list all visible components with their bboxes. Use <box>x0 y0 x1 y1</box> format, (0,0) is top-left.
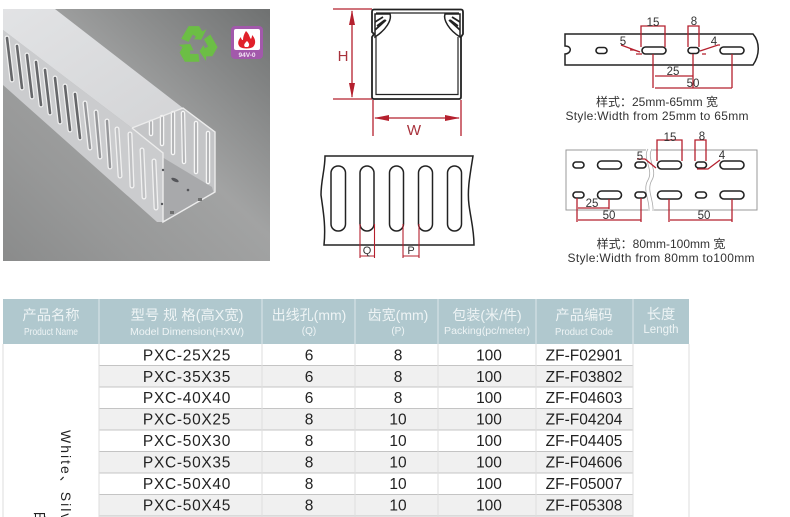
row PXC-50X35: 10 <box>389 454 407 472</box>
diagram: slotted side view with Q and P dimensions: Q <box>363 245 372 257</box>
H dimension <box>333 9 372 99</box>
caption: 80mm-100mm style <box>568 236 754 265</box>
table header: 型号 规 格(高X宽) <box>131 307 243 324</box>
row PXC-50X35: 8 <box>305 454 313 472</box>
table header: 齿宽(mm) <box>368 307 428 323</box>
diagram: duct cross-section with H and W dimensions: W <box>407 122 422 139</box>
row PXC-50X25 <box>143 412 623 428</box>
diagram: slotted side view with Q and P dimensions <box>321 156 474 258</box>
row PXC-40X40 <box>143 390 622 407</box>
row PXC-50X30: 10 <box>389 433 407 450</box>
row PXC-50X25: ZF-F04204 <box>546 412 623 428</box>
duct interior wall <box>132 108 215 222</box>
row PXC-50X30: 8 <box>305 433 313 450</box>
diagram: hole pattern for 80mm-100mm widths: 4 <box>719 150 726 162</box>
diagram: hole pattern for 25mm-65mm widths: 4 <box>711 36 718 48</box>
lip edge highlights <box>132 108 215 222</box>
diagram: hole pattern for 80mm-100mm widths: 50 <box>603 210 615 222</box>
left wall slots <box>7 38 208 208</box>
table header: (P) <box>391 326 405 337</box>
diagram: hole pattern for 80mm-100mm widths: 15 <box>664 132 676 144</box>
row PXC-50X25: 8 <box>305 412 313 428</box>
row PXC-35X35: 6 <box>305 369 313 386</box>
diagram: hole pattern for 80mm-100mm widths: 8 <box>699 131 705 143</box>
diagram: hole pattern for 25mm-65mm widths: 15 <box>647 17 659 29</box>
row PXC-50X45: 10 <box>389 498 407 514</box>
row PXC-50X30: PXC-50X30 <box>143 433 231 450</box>
row PXC-40X40: 8 <box>394 390 402 407</box>
diagram: hole pattern for 25mm-65mm widths <box>565 16 758 90</box>
diagram: duct cross-section with H and W dimensions <box>333 9 463 139</box>
row PXC-40X40: ZF-F04603 <box>546 390 622 407</box>
floor holes <box>161 169 189 205</box>
row PXC-50X25: PXC-50X25 <box>143 412 231 428</box>
duct top face <box>3 9 183 128</box>
row PXC-50X25: 100 <box>476 412 502 428</box>
table header: 长度 <box>647 306 675 323</box>
row PXC-50X40 <box>143 476 622 493</box>
row PXC-50X40: ZF-F05007 <box>546 476 622 493</box>
row PXC-25X25: 100 <box>476 348 502 364</box>
break line <box>648 148 652 212</box>
diagram: slotted side view with Q and P dimensions: P <box>407 245 415 257</box>
diagram: hole pattern for 25mm-65mm widths: 5 <box>620 36 626 48</box>
caption: 25mm-65mm style: 样式：25mm-65mm 宽 <box>596 94 718 109</box>
right wall slots <box>151 113 208 182</box>
row PXC-40X40: PXC-40X40 <box>143 390 231 407</box>
caption: 80mm-100mm style: 样式：80mm-100mm 宽 <box>597 236 725 251</box>
row PXC-35X35: PXC-35X35 <box>143 369 231 386</box>
row PXC-50X35: PXC-50X35 <box>143 454 231 472</box>
table header <box>3 299 689 344</box>
diagram: hole pattern for 25mm-65mm widths: 50 <box>687 78 699 90</box>
caption: 25mm-65mm style: Style:Width from 25mm to 65mm <box>566 109 748 123</box>
row PXC-35X35: 100 <box>476 369 502 386</box>
row PXC-35X35 <box>143 369 622 386</box>
table header: 包装(米/件) <box>452 307 522 323</box>
row PXC-50X30: ZF-F04405 <box>546 433 622 450</box>
diagram: hole pattern for 80mm-100mm widths: 25 <box>586 198 598 210</box>
table header: Product Name <box>24 327 78 338</box>
row PXC-25X25: ZF-F02901 <box>546 348 622 364</box>
row PXC-50X40: 10 <box>389 476 407 493</box>
row PXC-50X30: 100 <box>476 433 502 450</box>
row PXC-50X35: ZF-F04606 <box>546 454 622 472</box>
table header: 产品编码 <box>555 307 613 324</box>
icon: flame rating badge 94V-0: 94V-0 <box>238 52 256 59</box>
caption: 80mm-100mm style: Style:Width from 80mm to100mm <box>568 251 754 265</box>
W dimension <box>373 100 461 136</box>
icon: flame rating badge 94V-0 <box>231 26 263 59</box>
row stripes <box>99 366 633 516</box>
caption: 25mm-65mm style <box>566 94 748 123</box>
row PXC-50X30 <box>143 433 622 450</box>
row PXC-50X45: 100 <box>476 498 502 514</box>
row PXC-40X40: 100 <box>476 390 502 407</box>
row PXC-50X45: 8 <box>305 498 313 514</box>
table header: Model Dimension(HXW) <box>130 327 244 338</box>
diagram: hole pattern for 25mm-65mm widths: 8 <box>691 16 697 28</box>
table header: Length <box>643 324 679 336</box>
row PXC-35X35: ZF-F03802 <box>546 369 622 386</box>
table header: 出线孔(mm) <box>272 307 346 323</box>
diagram: hole pattern for 80mm-100mm widths: 5 <box>637 151 643 163</box>
row PXC-25X25: 6 <box>305 348 313 364</box>
row PXC-40X40: 6 <box>305 390 313 407</box>
table header: Product Code <box>555 327 613 338</box>
diagram: duct cross-section with H and W dimensions: H <box>338 48 348 65</box>
row PXC-25X25: PXC-25X25 <box>143 348 231 364</box>
table: product specifications <box>3 299 689 517</box>
photo: slotted cable duct on grey background <box>3 9 270 261</box>
diagram: hole pattern for 80mm-100mm widths <box>566 131 757 222</box>
diagram: hole pattern for 80mm-100mm widths: 50 <box>698 210 710 222</box>
row PXC-35X35: 8 <box>394 369 402 386</box>
row PXC-50X45: PXC-50X45 <box>143 498 231 514</box>
table header: Packing(pc/meter) <box>444 326 530 337</box>
table header: 产品名称 <box>22 307 80 324</box>
icon: green recycle symbol <box>176 26 221 68</box>
duct left side face <box>3 30 163 222</box>
row PXC-50X25: 10 <box>389 412 407 428</box>
row text <box>143 348 623 514</box>
row PXC-50X40: 100 <box>476 476 502 493</box>
row PXC-25X25: 8 <box>394 348 402 364</box>
row PXC-50X40: PXC-50X40 <box>143 476 231 493</box>
diagram: hole pattern for 25mm-65mm widths: 25 <box>667 66 679 78</box>
row PXC-50X45 <box>143 498 622 514</box>
row PXC-25X25 <box>143 348 622 364</box>
row PXC-50X40: 8 <box>305 476 313 493</box>
duct clip details <box>375 14 390 37</box>
duct floor <box>162 157 214 221</box>
row PXC-50X35: 100 <box>476 454 502 472</box>
rotated product name <box>32 430 74 517</box>
row PXC-50X45: ZF-F05308 <box>546 498 622 514</box>
table header: (Q) <box>302 326 316 337</box>
row PXC-50X35 <box>143 454 622 472</box>
